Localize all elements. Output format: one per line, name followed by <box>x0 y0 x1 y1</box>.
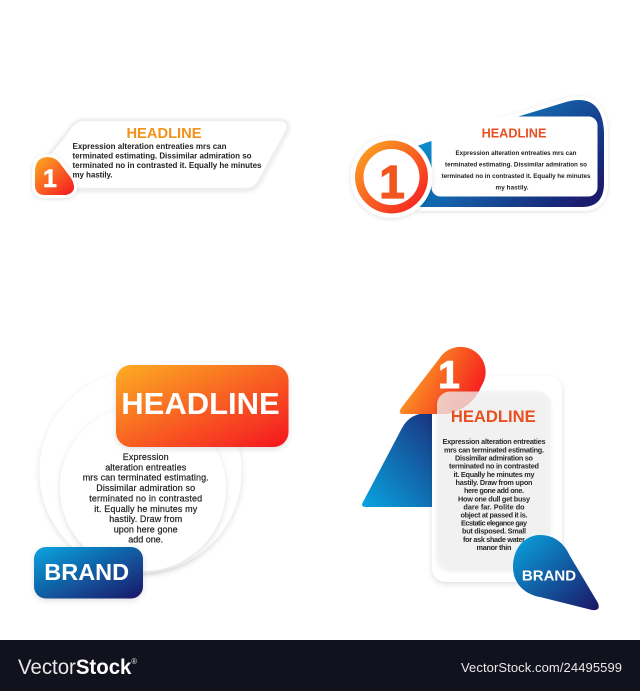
text block: object at passed it is. <box>460 511 528 520</box>
text block: alteration entreaties <box>105 462 187 472</box>
inner circle <box>60 405 226 571</box>
text block: hastily. Draw from <box>109 514 182 524</box>
icon: orange number badge: 1 <box>43 165 57 193</box>
headline banner: HEADLINE <box>121 386 280 421</box>
icon: number ring <box>355 140 428 214</box>
text block: Expression alteration entreaties mrs can <box>72 142 227 151</box>
text block: here gone add one. <box>464 486 524 495</box>
brand teardrop: BRAND <box>522 568 576 585</box>
panel: bottom-right card <box>362 347 599 610</box>
text block: terminated no in contrasted it. Equally he minutes <box>72 161 262 170</box>
text block: mrs can terminated estimating. <box>83 473 209 483</box>
text block: for ask shade water <box>463 535 525 544</box>
text block: dare far. Polite do <box>463 502 525 511</box>
heading: HEADLINE <box>126 126 202 142</box>
text block: terminated no in contrasted it. Equally he minutes <box>442 173 591 180</box>
text block <box>72 142 262 180</box>
panel: top-left headline card <box>35 120 288 195</box>
text block: my hastily. <box>496 184 529 192</box>
large circle <box>40 371 242 573</box>
blue backing shape <box>412 100 604 207</box>
orange drop with number: 1 <box>438 354 460 397</box>
footer bar <box>0 640 640 691</box>
text block: add one. <box>128 535 163 545</box>
heading: HEADLINE <box>482 126 546 140</box>
text block: Ecstatic elegance gay <box>461 519 528 528</box>
text block: Dissimilar admiration so <box>96 483 195 493</box>
icon: orange number badge <box>35 157 74 195</box>
brand teardrop <box>513 535 599 610</box>
card shape <box>36 120 288 189</box>
text block: Expression alteration entreaties <box>442 437 546 446</box>
headline banner <box>116 365 288 447</box>
text block: Expression <box>123 452 169 462</box>
heading: HEADLINE <box>451 407 536 426</box>
text block: it. Equally he minutes my <box>454 470 535 479</box>
text block: but disposed. Small <box>462 527 526 536</box>
white text card <box>432 116 598 196</box>
panel: bottom-left circles <box>34 365 288 598</box>
brand banner <box>34 547 143 598</box>
icon: number ring: 1 <box>379 156 405 208</box>
text block: How one dull get busy <box>458 494 531 503</box>
text block: terminated estimating. Dissimilar admiration so <box>445 162 587 168</box>
text block <box>442 150 591 192</box>
logo wordmark: ® <box>131 657 137 666</box>
text block: manor thin <box>476 543 512 552</box>
text block: my hastily. <box>72 170 112 180</box>
text block: mrs can terminated estimating. <box>444 445 544 454</box>
orange drop with number <box>400 347 486 414</box>
text block: Dissimilar admiration so <box>455 453 534 462</box>
inner translucent card <box>437 392 550 570</box>
brand banner: BRAND <box>44 559 129 585</box>
text block: Expression alteration entreaties mrs can <box>456 150 577 157</box>
blue triangle shape <box>362 413 445 507</box>
text block: terminated no in contrasted <box>449 462 539 471</box>
text block: it. Equally he minutes my <box>94 504 198 514</box>
text block <box>442 437 546 552</box>
text block: hastily. Draw from upon <box>456 478 532 487</box>
panel: top-right headline card <box>355 100 604 214</box>
logo wordmark: VectorStock <box>18 655 134 679</box>
outer white card <box>432 376 562 582</box>
image id: VectorStock.com/24495599 <box>461 660 622 675</box>
text block: terminated estimating. Dissimilar admiration so <box>72 152 252 160</box>
text block: upon here gone <box>114 524 178 534</box>
text block <box>83 452 209 545</box>
text block: terminated no in contrasted <box>89 493 202 503</box>
